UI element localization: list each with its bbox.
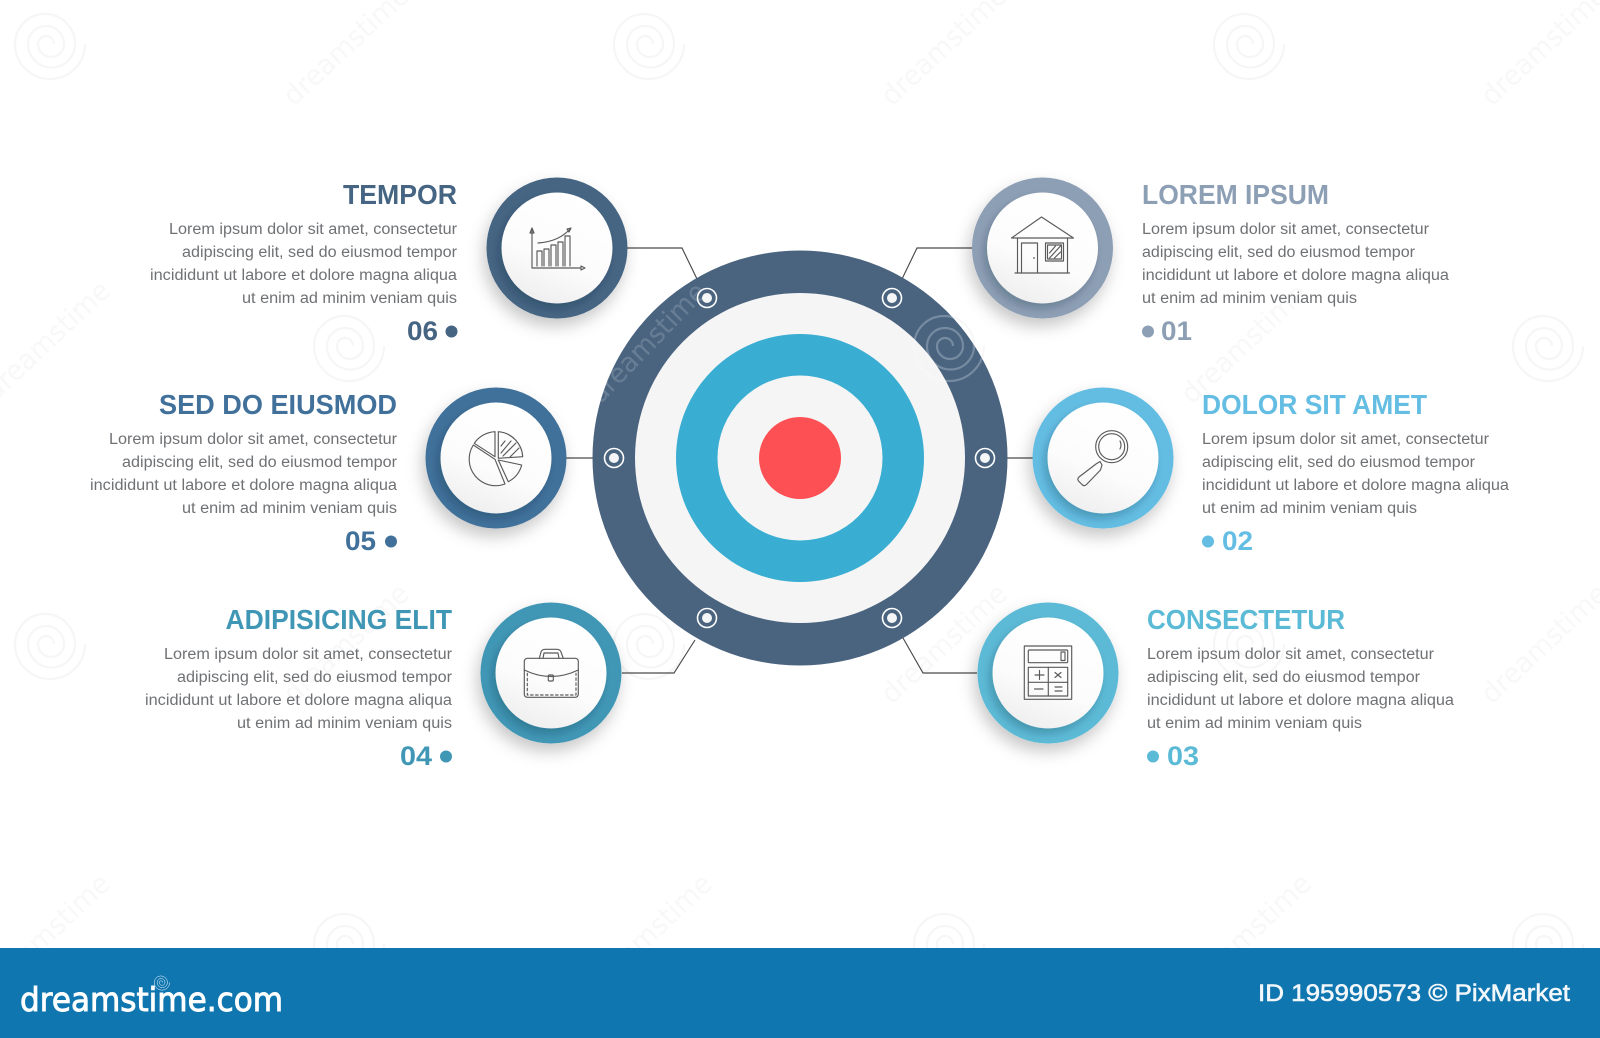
body text: ut enim ad minim veniam quis <box>182 500 397 517</box>
panel: 02 dolor sit amet <box>1032 388 1509 556</box>
body text: adipiscing elit, sed do eiusmod tempor <box>1147 669 1420 686</box>
body text <box>150 221 457 307</box>
body text: adipiscing elit, sed do eiusmod tempor <box>1142 244 1415 261</box>
body text: adipiscing elit, sed do eiusmod tempor <box>122 454 397 471</box>
body text: ut enim ad minim veniam quis <box>237 715 452 732</box>
panel: 05 sed do eiusmod <box>90 388 566 556</box>
number: 04 <box>400 741 432 771</box>
circle 04 <box>480 602 622 744</box>
circle 06 <box>486 178 628 318</box>
icon: calculator <box>1024 646 1072 699</box>
heading: ADIPISICING ELIT <box>226 604 452 635</box>
panel: 03 consectetur <box>978 602 1454 771</box>
body text <box>90 431 397 517</box>
dot <box>1142 326 1154 338</box>
heading: SED DO EIUSMOD <box>159 389 397 420</box>
body text: Lorem ipsum dolor sit amet, consectetur <box>164 646 452 663</box>
background watermark text: dreamstime <box>874 577 1014 710</box>
body text: ut enim ad minim veniam quis <box>242 290 457 307</box>
background watermark text: dreamstime <box>1174 277 1314 410</box>
connector lines <box>566 248 1033 673</box>
heading: TEMPOR <box>343 179 457 210</box>
body text: Lorem ipsum dolor sit amet, consectetur <box>169 221 457 238</box>
body text <box>1147 646 1454 732</box>
panel: 04 adipisicing elit <box>145 602 622 771</box>
body text: Lorem ipsum dolor sit amet, consectetur <box>1202 431 1489 448</box>
background watermark text: dreamstime <box>579 867 719 1000</box>
circle 02 <box>1032 388 1174 528</box>
panel: 01 lorem ipsum <box>972 178 1449 346</box>
background watermark text: dreamstime <box>276 577 416 710</box>
body text: ut enim ad minim veniam quis <box>1202 500 1417 517</box>
body text <box>1202 431 1509 517</box>
body text: adipiscing elit, sed do eiusmod tempor <box>182 244 457 261</box>
body text: incididunt ut labore et dolore magna aliqua <box>1147 692 1454 709</box>
watermark over ring <box>583 277 984 410</box>
body text: adipiscing elit, sed do eiusmod tempor <box>177 669 452 686</box>
footer band <box>0 948 1600 1038</box>
body text <box>145 646 452 732</box>
body text: incididunt ut labore et dolore magna aliqua <box>150 267 457 284</box>
number: 02 <box>1222 526 1253 556</box>
body text: ut enim ad minim veniam quis <box>1142 290 1357 307</box>
body text: incididunt ut labore et dolore magna aliqua <box>1142 267 1449 284</box>
body text: Lorem ipsum dolor sit amet, consectetur <box>109 431 397 448</box>
circle 03 <box>978 602 1118 744</box>
icon: magnifier <box>1078 431 1128 486</box>
heading: CONSECTETUR <box>1147 604 1345 635</box>
background watermark text: dreamstime <box>1178 867 1318 1000</box>
circle 05 <box>426 388 566 528</box>
dot <box>1202 536 1214 548</box>
number: 03 <box>1167 741 1199 771</box>
body text <box>1142 221 1449 307</box>
footer logo spiral <box>154 976 170 990</box>
body text: ut enim ad minim veniam quis <box>1147 715 1362 732</box>
dot <box>446 326 458 338</box>
ring markers <box>604 288 994 628</box>
heading: LOREM IPSUM <box>1142 179 1329 210</box>
dot <box>385 536 397 548</box>
heading: DOLOR SIT AMET <box>1202 389 1427 420</box>
body text: Lorem ipsum dolor sit amet, consectetur <box>1147 646 1434 663</box>
dot <box>440 750 452 762</box>
number: 05 <box>345 526 376 556</box>
icon: briefcase <box>524 649 578 697</box>
footer credit: ID 195990573 © PixMarket <box>1258 980 1570 1007</box>
panel: 06 tempor <box>150 178 628 346</box>
body text: incididunt ut labore et dolore magna aliqua <box>145 692 452 709</box>
icon: pie chart <box>469 432 523 486</box>
dot <box>1147 750 1159 762</box>
circle 01 <box>972 178 1113 318</box>
icon: bar chart <box>530 228 585 270</box>
watermark over ring: dreamstime <box>583 277 713 410</box>
body text: Lorem ipsum dolor sit amet, consectetur <box>1142 221 1429 238</box>
body text: incididunt ut labore et dolore magna aliqua <box>90 477 397 494</box>
body text: incididunt ut labore et dolore magna aliqua <box>1202 477 1509 494</box>
body text: adipiscing elit, sed do eiusmod tempor <box>1202 454 1475 471</box>
number: 06 <box>407 316 438 346</box>
footer logo text: dreamstime.com <box>20 980 283 1019</box>
icon: house <box>1012 217 1074 273</box>
number: 01 <box>1161 316 1192 346</box>
central target <box>592 250 1008 666</box>
